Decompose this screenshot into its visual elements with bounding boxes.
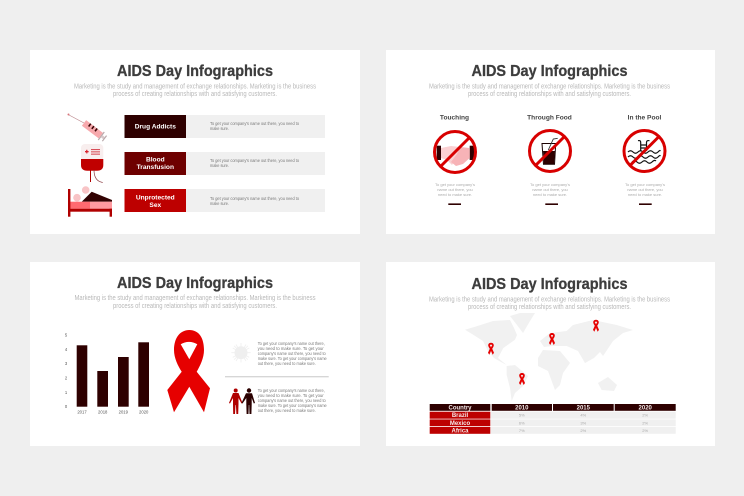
row: drug addicts: Drug Addicts	[135, 124, 176, 130]
data table	[430, 404, 676, 434]
subtitle: process of creating relationships with and satisfying customers.	[113, 91, 277, 98]
subtitle	[74, 84, 316, 98]
text block: virus: To get your company's name out there,	[258, 341, 325, 346]
subtitle	[429, 84, 670, 98]
table row: Brazil: 4%	[580, 413, 587, 418]
table header: Country	[448, 406, 472, 412]
bar chart: 2017	[77, 410, 87, 414]
column: in the pool: name out there, you	[627, 187, 663, 192]
table row: Africa: 2%	[580, 428, 587, 433]
text block: virus: you need to make sure. To get your	[258, 346, 324, 351]
bar chart: 5	[65, 332, 68, 338]
text block: virus: out there, you need to make sure.	[258, 361, 316, 366]
column: touching: need to make sure.	[438, 192, 472, 197]
row: blood transfusion: Transfusion	[137, 164, 174, 171]
bar chart	[65, 332, 149, 414]
icon: virus	[231, 343, 251, 362]
row: blood transfusion: To get your company's name out there, you need to	[210, 158, 300, 163]
text block: people: company's name out there, you need to	[258, 398, 326, 403]
table header: 2020	[639, 406, 653, 412]
subtitle: Marketing is the study and management of exchange relationships. Marketing is the business	[429, 296, 670, 304]
subtitle: Marketing is the study and management of exchange relationships. Marketing is the business	[74, 295, 316, 302]
table row: Brazil: 5%	[519, 413, 525, 418]
subtitle	[74, 295, 316, 310]
panel: world map and table	[386, 262, 715, 446]
bar chart: 0	[65, 404, 68, 409]
table row: Mexico: 6%	[519, 420, 525, 425]
subtitle: Marketing is the study and management of exchange relationships. Marketing is the business	[429, 84, 670, 90]
row: unprotected sex: make sure.	[210, 201, 229, 206]
title: AIDS Day Infographics	[117, 63, 273, 80]
bar chart: 2019	[119, 410, 129, 414]
table row: Mexico: 3%	[580, 420, 587, 425]
icon: syringe	[68, 114, 108, 143]
table header: 2015	[577, 406, 591, 412]
column: in the pool: need to make sure.	[628, 192, 662, 197]
row: drug addicts: make sure.	[210, 126, 229, 131]
icon: blood bag	[81, 144, 103, 182]
subtitle: process of creating relationships with and satisfying customers.	[113, 303, 277, 310]
row: unprotected sex: Unprotected	[136, 194, 175, 202]
column: through food: To get your company's	[530, 182, 570, 187]
table row: Africa: Africa	[451, 428, 469, 434]
table header: 2010	[515, 406, 529, 412]
map pin: europe	[549, 333, 555, 345]
subtitle: Marketing is the study and management of exchange relationships. Marketing is the business	[74, 84, 316, 90]
bar chart: 3	[65, 361, 68, 366]
text block: virus: company's name out there, you need to	[258, 351, 326, 356]
table row: Mexico: Mexico	[450, 421, 471, 427]
subtitle: process of creating relationships with and satisfying customers.	[468, 91, 631, 98]
table header	[430, 404, 676, 412]
text block: virus: make sure. To get your company's name	[258, 356, 327, 361]
table row: Brazil: 2%	[642, 413, 649, 418]
map pin: north america	[488, 343, 494, 355]
text block: people: make sure. To get your company's name	[258, 403, 327, 408]
icon: two people	[229, 388, 255, 414]
column: in the pool	[624, 114, 665, 205]
bar chart: 2018	[98, 410, 108, 414]
text block: people: you need to make sure. To get your	[258, 393, 324, 398]
bar chart: 2020	[139, 410, 149, 414]
table row: Africa: 7%	[519, 428, 525, 433]
row: blood transfusion: Blood	[146, 156, 165, 164]
icon: bed	[68, 186, 112, 217]
map pin: asia	[593, 320, 599, 332]
column: touching	[434, 114, 476, 205]
map pin: south america	[519, 373, 525, 385]
row: unprotected sex: To get your company's name out there, you need to	[210, 196, 300, 201]
title: AIDS Day Infographics	[117, 275, 273, 292]
column: through food: Through Food	[527, 114, 572, 122]
title: AIDS Day Infographics	[472, 63, 628, 80]
text block: people: out there, you need to make sure.	[258, 408, 316, 413]
bar chart: 4	[65, 347, 68, 352]
column: in the pool: To get your company's	[625, 182, 665, 187]
column: through food	[527, 114, 572, 205]
table row: Mexico: 2%	[642, 420, 649, 425]
table row: Brazil: Brazil	[452, 413, 468, 419]
title: AIDS Day Infographics	[472, 276, 628, 293]
column: touching: To get your company's	[435, 182, 475, 187]
world map	[465, 313, 633, 401]
icon: red ribbon	[167, 330, 210, 412]
bar chart: 2	[65, 376, 68, 380]
table row: Brazil	[430, 412, 676, 419]
subtitle: process of creating relationships with and satisfying customers.	[468, 304, 631, 311]
row: blood transfusion: make sure.	[210, 163, 229, 168]
panel: who is at risk	[30, 50, 360, 234]
table row: Africa: 2%	[642, 428, 649, 433]
panel: statistics and ribbon	[30, 262, 360, 446]
column: through food: name out there, you	[532, 187, 568, 192]
column: touching: Touching	[440, 114, 469, 122]
row: blood transfusion	[124, 152, 325, 175]
column: touching: name out there, you	[437, 187, 473, 192]
text block: people: To get your company's name out there,	[258, 388, 325, 393]
row: unprotected sex	[124, 189, 325, 212]
text block: virus	[258, 341, 327, 366]
panel: how it does not spread	[386, 50, 715, 234]
table row: Mexico	[430, 419, 676, 427]
row: unprotected sex: Sex	[149, 202, 161, 209]
bar chart: 1	[65, 390, 68, 395]
row: drug addicts: To get your company's name out there, you need to	[210, 121, 300, 126]
table row: Africa	[430, 427, 676, 434]
text block: people	[258, 388, 327, 413]
subtitle	[429, 296, 670, 311]
row: drug addicts	[124, 115, 325, 138]
column: in the pool: In the Pool	[628, 114, 662, 122]
column: through food: need to make sure.	[533, 192, 567, 197]
